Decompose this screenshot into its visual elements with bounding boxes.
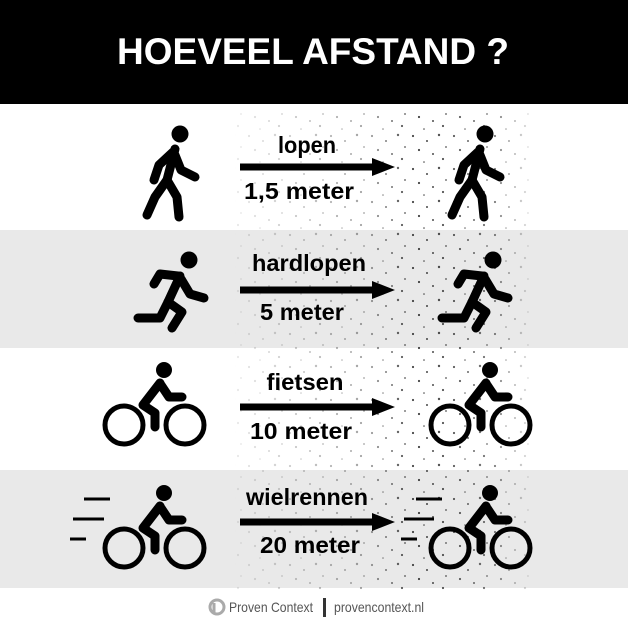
row backgrounds xyxy=(0,230,628,588)
label: wielrennen: wielrennen xyxy=(245,484,368,510)
icon: runner left xyxy=(138,252,204,328)
arrow xyxy=(240,513,395,531)
label: hardlopen: hardlopen xyxy=(252,250,366,276)
arrow xyxy=(240,281,395,299)
footer xyxy=(210,598,424,617)
distance: 20 meter: 20 meter xyxy=(260,532,360,558)
icon: runner right xyxy=(442,252,508,328)
icon: walker left xyxy=(147,126,195,217)
row 3: fietsen xyxy=(105,362,530,444)
icon: bike right xyxy=(431,362,530,444)
row 1: lopen xyxy=(147,126,500,217)
title: HOEVEEL AFSTAND ? xyxy=(117,31,509,72)
website: provencontext.nl xyxy=(334,599,424,615)
distance: 5 meter: 5 meter xyxy=(260,299,344,325)
brand name: Proven Context xyxy=(229,599,313,615)
row 4: wielrennen xyxy=(70,484,530,567)
icon: walker right xyxy=(452,126,500,217)
icon: racing bike right with speed lines xyxy=(401,485,530,567)
icon: logo xyxy=(210,600,224,614)
droplet speckles xyxy=(235,110,535,590)
icon: racing bike left with speed lines xyxy=(70,485,204,567)
arrow xyxy=(240,398,395,416)
icon: bike left xyxy=(105,362,204,444)
label: fietsen: fietsen xyxy=(266,369,344,395)
distance: 10 meter: 10 meter xyxy=(250,418,352,444)
label: lopen: lopen xyxy=(278,132,336,158)
header bar xyxy=(0,0,628,104)
row 2: hardlopen xyxy=(138,250,508,328)
distance: 1,5 meter: 1,5 meter xyxy=(244,178,354,204)
arrow xyxy=(240,158,395,176)
